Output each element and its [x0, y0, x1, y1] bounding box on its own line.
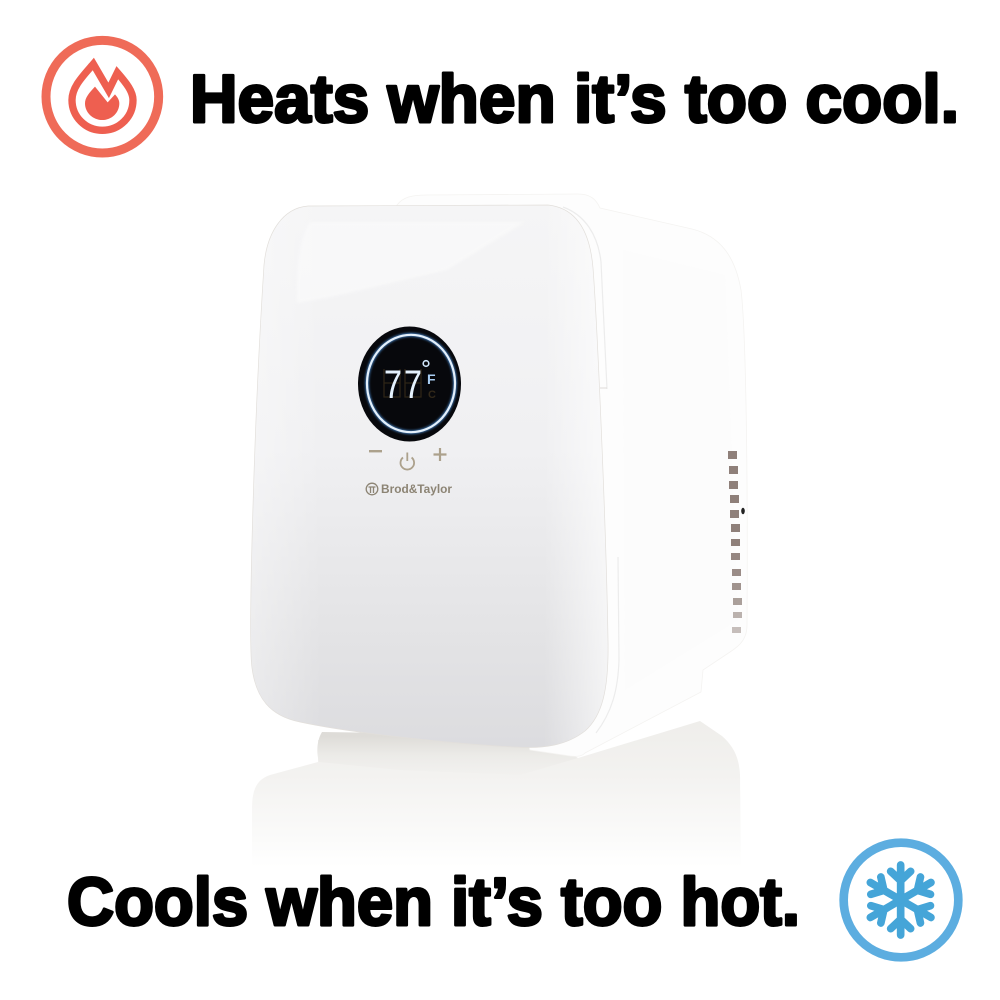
digits 77: 77 [383, 363, 423, 411]
power button [400, 452, 414, 470]
unit C: C [428, 389, 436, 401]
logo text: Brod&Taylor [381, 484, 453, 496]
fridge body [397, 194, 747, 756]
side vents [728, 451, 742, 633]
display [358, 326, 461, 442]
minus button [369, 450, 382, 452]
icon: snowflake in blue circle [844, 843, 958, 957]
door side light [251, 205, 608, 747]
heading: heats: Heats when it’s too cool. [190, 61, 959, 137]
fridge product [251, 194, 747, 775]
display ring [367, 335, 455, 432]
fridge door [251, 205, 608, 747]
side jack [741, 508, 745, 514]
unit F: F [427, 371, 436, 387]
plus button [434, 448, 446, 461]
door seam [563, 207, 619, 733]
door gloss highlight [297, 222, 524, 303]
degree mark [423, 361, 429, 366]
brand logo [366, 483, 453, 496]
fridge foot [317, 732, 578, 775]
door hinge seam [600, 387, 607, 389]
display glow [367, 335, 455, 432]
fridge reflection [252, 721, 741, 868]
side panel shade [623, 250, 738, 690]
dim segments [384, 369, 421, 397]
icon: flame in red circle [46, 40, 159, 153]
heading: cools: Cools when it’s too hot. [67, 864, 800, 940]
logo mark [366, 483, 378, 495]
display bezel [358, 326, 461, 442]
